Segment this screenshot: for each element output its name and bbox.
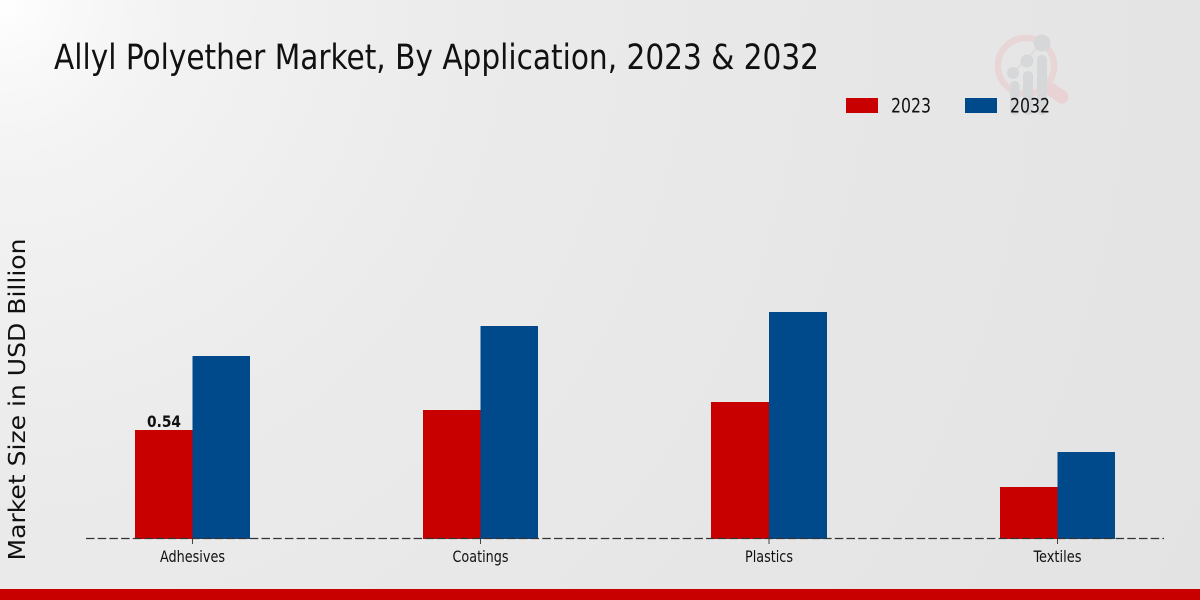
value label: 0.54 (147, 412, 181, 431)
group: Plastics (711, 312, 827, 539)
x-axis labels: Coatings (452, 547, 508, 566)
legend: 2032 (965, 94, 1050, 118)
group: Coatings (423, 326, 538, 539)
legend (846, 94, 1050, 118)
group: Adhesives (135, 356, 250, 539)
x-axis labels: Plastics (745, 547, 793, 566)
legend: 2032: 2032 (1010, 94, 1050, 118)
x-axis labels: Textiles (1033, 547, 1082, 566)
bar chart (86, 312, 1164, 566)
legend: 2023 (846, 94, 931, 118)
title: Allyl Polyether Market, By Application, 2023 & 2032 (54, 38, 819, 78)
watermark logo icon (998, 34, 1062, 115)
legend: 2023: 2023 (891, 94, 931, 118)
group: Textiles (1000, 452, 1115, 539)
x-axis labels: Adhesives (160, 547, 225, 566)
y-axis label: Market Size in USD Billion (3, 238, 31, 560)
x-axis labels (160, 547, 1082, 566)
footer bar (0, 589, 1200, 600)
